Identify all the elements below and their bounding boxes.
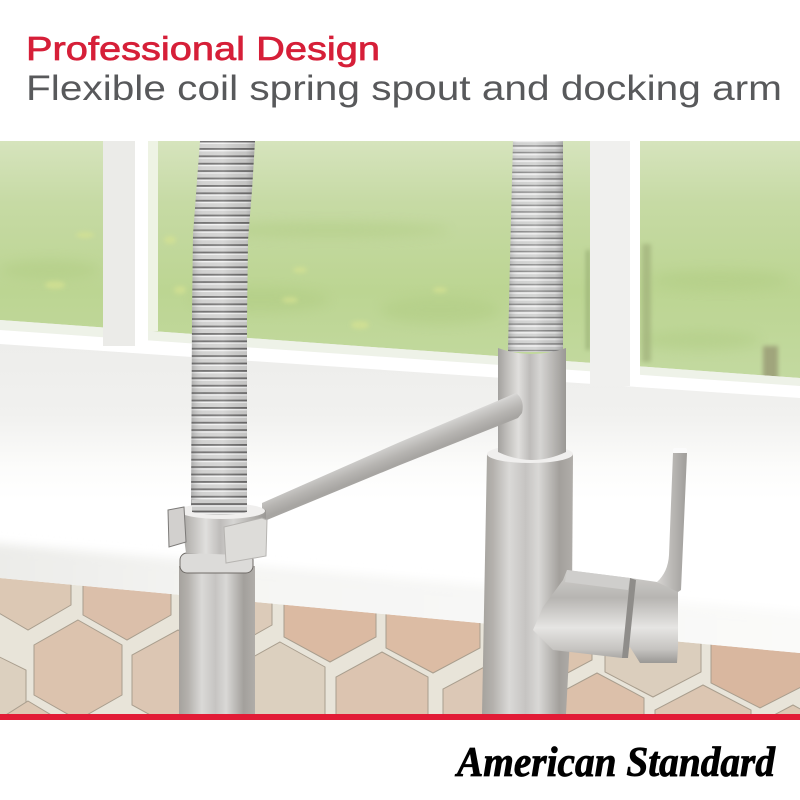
left faucet: flexible coil spring [191, 141, 255, 512]
right faucet: main body [482, 445, 573, 714]
heading: professional design: Professional Design [26, 30, 380, 67]
subheading: Flexible coil spring spout and docking arm [26, 69, 782, 108]
panel: photo of faucet [0, 141, 800, 714]
red divider bar [0, 714, 800, 720]
right faucet: docking cylinder [498, 348, 566, 460]
right faucet: flexible coil spring [508, 141, 563, 352]
faucet handle [533, 448, 687, 663]
title [26, 30, 782, 108]
window frame [103, 141, 640, 386]
window sill [0, 320, 800, 398]
left faucet: lower tube [179, 566, 255, 714]
counter edge [0, 542, 799, 653]
grass outside window [0, 141, 800, 391]
tile backsplash [0, 578, 800, 714]
logo: american standard: American Standard [454, 740, 776, 786]
docking collar [168, 500, 267, 573]
docking arm [262, 393, 523, 522]
wall and counter [0, 320, 800, 653]
